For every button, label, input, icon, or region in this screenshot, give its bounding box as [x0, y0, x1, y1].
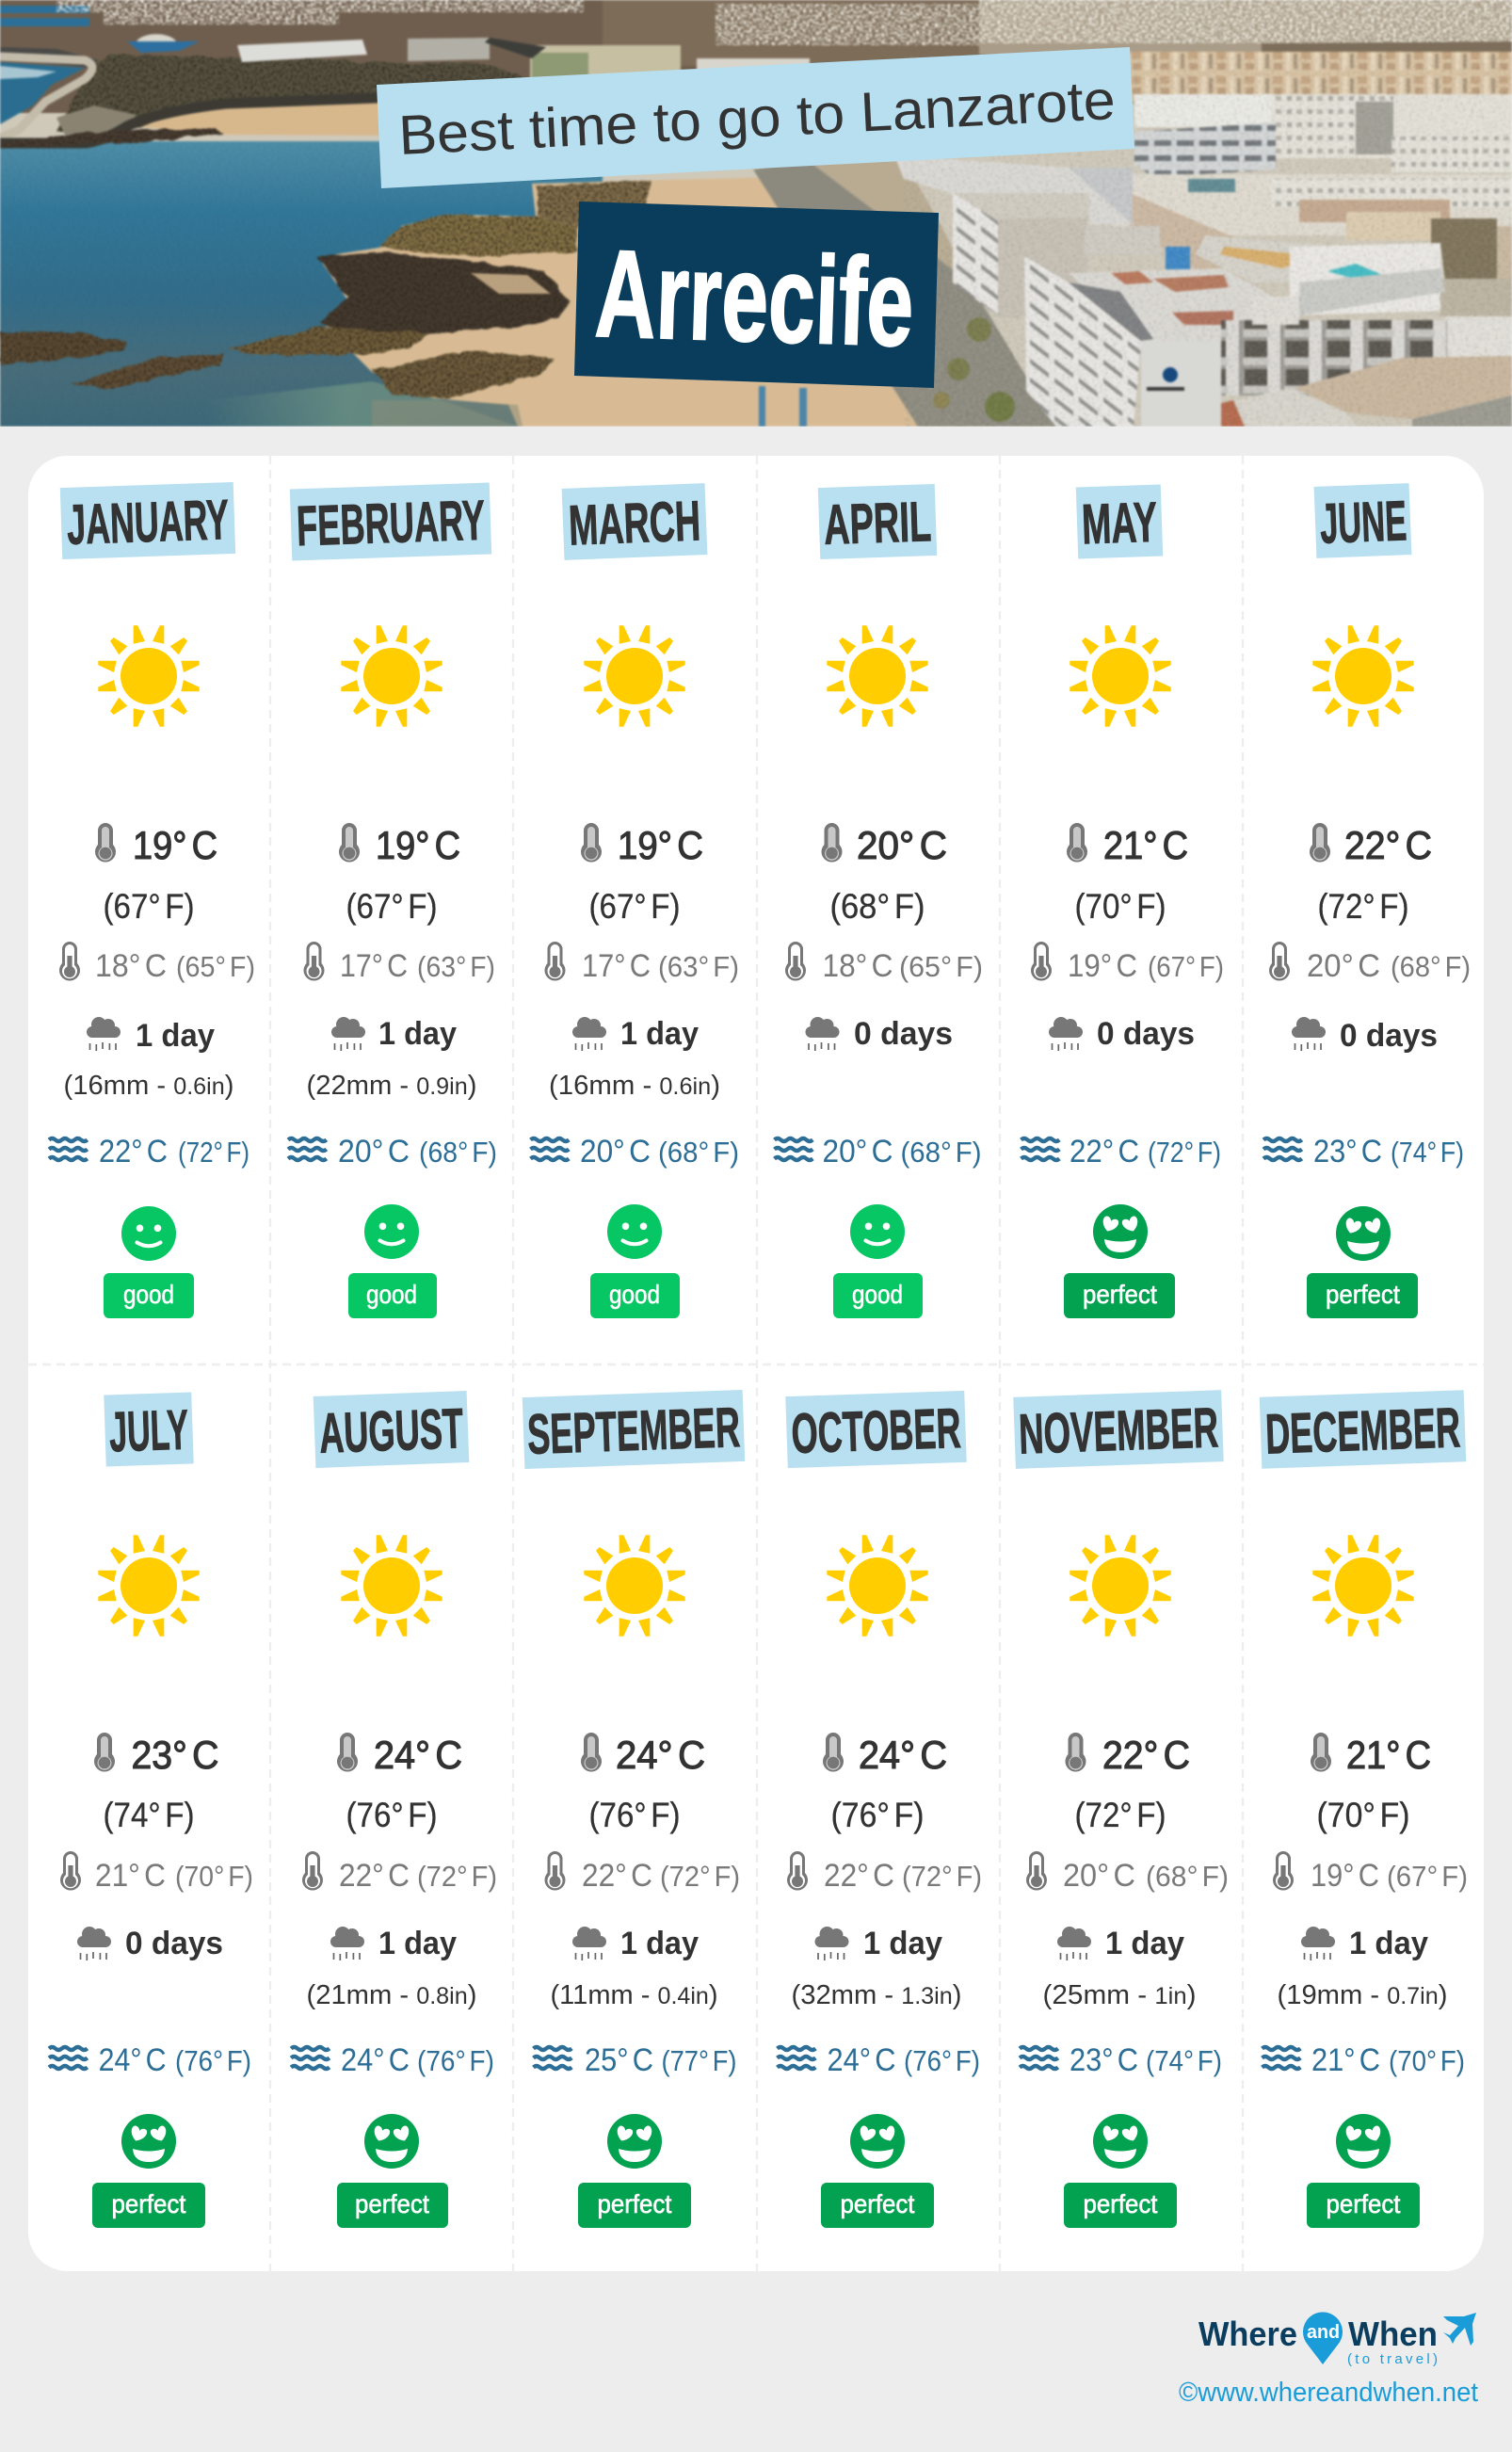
low temperature: (72° F): [902, 1860, 982, 1893]
month label: [1314, 483, 1411, 558]
month label: [104, 1392, 194, 1467]
icon: sun: [584, 1535, 685, 1637]
sea temperature: 23° C: [1313, 1134, 1382, 1170]
title banner: [377, 47, 1134, 188]
sea temperature: (68° F): [419, 1136, 497, 1169]
month label: [785, 1391, 967, 1468]
sea temperature: [531, 1134, 739, 1170]
month label: [290, 483, 491, 560]
sea temperature: 20° C: [338, 1134, 410, 1170]
high temperature: 19° C: [618, 823, 703, 867]
logo: Where and When to travel: and: [1307, 2322, 1340, 2343]
title text: Best time to go to Lanzarote: [397, 69, 1117, 167]
sea temperature: [49, 2042, 251, 2078]
high temperature: 24° C: [374, 1733, 462, 1777]
hotel sign tower: [1141, 341, 1221, 427]
high temperature: 21° C: [1346, 1733, 1431, 1777]
high temperature: [1067, 823, 1188, 926]
rainfall: [806, 1016, 953, 1052]
panel: May: [1000, 456, 1243, 1364]
rainfall: [550, 1926, 717, 2010]
rainfall: (21mm - 0.8in): [307, 1980, 476, 2010]
sea temperature: 22° C: [1070, 1134, 1139, 1170]
rainfall: (16mm - 0.6in): [64, 1071, 234, 1101]
icon: map pin: [1303, 2312, 1343, 2364]
panel: February: [270, 456, 513, 1364]
low temperature: [302, 1851, 497, 1894]
rating: perfect: [1307, 1206, 1418, 1318]
city detail texture: [904, 56, 1512, 427]
month label: JUNE: [1319, 489, 1407, 556]
high temperature: 22° C: [1344, 823, 1432, 867]
sea temperature: 22° C: [99, 1134, 168, 1170]
rainfall: [549, 1016, 720, 1101]
panel: April: [757, 456, 1000, 1364]
icon: sun: [1312, 1535, 1414, 1637]
icon: plane: [1443, 2313, 1476, 2346]
low temperature: [787, 1851, 982, 1894]
low temperature: [544, 942, 739, 984]
month label: MARCH: [568, 489, 701, 557]
high temperature: 21° C: [1103, 823, 1188, 867]
month label: MAY: [1081, 491, 1158, 556]
rating: good: good: [123, 1280, 174, 1309]
low temperature: 20° C: [1307, 948, 1380, 984]
low temperature: [1273, 1851, 1468, 1894]
month label: FEBRUARY: [296, 489, 486, 557]
sea temperature: [1262, 2042, 1465, 2078]
rainfall: 0 days: [1340, 1018, 1438, 1054]
panel: monthly climate card: [28, 456, 1484, 2271]
month label: AUGUST: [318, 1396, 464, 1465]
header photo: aerial view of Arrecife: [0, 0, 1512, 427]
rating: good: [833, 1204, 923, 1318]
high temperature: (76° F): [830, 1796, 925, 1834]
rating: perfect: perfect: [111, 2189, 186, 2218]
icon: sun: [1312, 625, 1414, 727]
high temperature: 24° C: [859, 1733, 947, 1777]
sea: [0, 141, 603, 427]
low temperature: (67° F): [1387, 1860, 1468, 1893]
low temperature: [785, 942, 983, 984]
high temperature: (67° F): [589, 887, 680, 926]
rating: perfect: perfect: [1326, 2189, 1401, 2218]
high temperature: 19° C: [133, 823, 217, 867]
high temperature: [823, 1733, 947, 1834]
high temperature: (68° F): [830, 887, 925, 926]
sea temperature: (77° F): [661, 2044, 736, 2077]
icon: sun: [827, 625, 928, 727]
high temperature: [581, 823, 703, 926]
high temperature: 23° C: [132, 1733, 218, 1777]
rating: perfect: perfect: [355, 2189, 429, 2218]
month label: JULY: [108, 1398, 189, 1463]
logo: Where and When to travel: (to travel): [1347, 2351, 1438, 2367]
sea temperature: [291, 2042, 494, 2078]
rainfall: [1043, 1926, 1196, 2010]
month label: [818, 484, 937, 559]
icon: sun: [98, 625, 200, 727]
low temperature: (68° F): [1146, 1860, 1229, 1893]
month label: [314, 1391, 469, 1468]
panel: November: [1000, 1364, 1243, 2271]
high temperature: [581, 1733, 705, 1834]
sea temperature: 24° C: [99, 2042, 167, 2078]
water grain texture: [6, 169, 7, 171]
rating: perfect: [821, 2114, 934, 2228]
month label: SEPTEMBER: [526, 1395, 741, 1466]
rainfall: [791, 1926, 961, 2010]
shallow green water: [207, 381, 518, 427]
rainfall: 1 day: [620, 1926, 699, 1961]
hotel main facade: [1024, 256, 1141, 427]
low temperature: 19° C: [1068, 948, 1137, 984]
high temperature: [337, 1733, 462, 1834]
month label: [523, 1390, 745, 1469]
dome, hangar and hotels: [137, 34, 176, 41]
high temperature: (67° F): [346, 887, 437, 926]
low temperature: 17° C: [582, 948, 651, 984]
rainfall: 0 days: [125, 1926, 223, 1961]
sea temperature: [49, 1134, 249, 1170]
month label: [562, 483, 707, 560]
panel: March: [513, 456, 757, 1364]
rainfall: (22mm - 0.9in): [307, 1071, 476, 1101]
city name: Arrecife: [593, 224, 916, 372]
rainfall: [1049, 1016, 1195, 1052]
rainfall: 1 day: [620, 1016, 699, 1052]
rocks: [0, 128, 650, 398]
low temperature: (63° F): [417, 950, 495, 983]
land behind the shore: [0, 0, 699, 115]
low temperature: (65° F): [176, 950, 255, 983]
rating: perfect: [1064, 1204, 1175, 1318]
low temperature: (63° F): [658, 950, 739, 983]
low temperature: (65° F): [899, 950, 983, 983]
rainfall: (25mm - 1in): [1043, 1980, 1196, 2010]
foreground roofs: [1295, 356, 1512, 419]
high temperature: 19° C: [376, 823, 460, 867]
month label: [1013, 1390, 1224, 1469]
beach umbrellas: [759, 386, 765, 427]
rating: perfect: perfect: [840, 2189, 915, 2218]
sea temperature: [1021, 1134, 1221, 1170]
low temperature: (72° F): [417, 1860, 497, 1893]
icon: sun: [98, 1535, 200, 1637]
low temperature: 22° C: [824, 1858, 894, 1894]
rating: perfect: perfect: [1083, 2189, 1158, 2218]
panel: August: [270, 1364, 513, 2271]
rainfall: 1 day: [136, 1018, 215, 1054]
month label: [1076, 485, 1163, 558]
high temperature: [1310, 823, 1432, 926]
low temperature: 20° C: [1063, 1858, 1135, 1894]
rainfall: (11mm - 0.4in): [550, 1980, 717, 2010]
sea temperature: (68° F): [900, 1136, 981, 1169]
low temperature: 19° C: [1311, 1858, 1379, 1894]
high temperature: (76° F): [346, 1796, 437, 1834]
inlet sea and promenade: [0, 62, 85, 124]
hotel logo mark: [1163, 367, 1178, 382]
high temperature: [1066, 1733, 1190, 1834]
rainfall: [1292, 1017, 1438, 1054]
rating: perfect: perfect: [1083, 1280, 1157, 1309]
low temperature: [59, 942, 255, 984]
icon: sun: [341, 1535, 442, 1637]
panel: June: [1243, 456, 1484, 1364]
low temperature: (70° F): [175, 1860, 253, 1893]
rating: perfect: [1307, 2114, 1420, 2228]
sea temperature: [1020, 2042, 1222, 2078]
month label: JANUARY: [66, 488, 230, 557]
sea temperature: (72° F): [1148, 1136, 1221, 1169]
rainfall: [1277, 1926, 1448, 2010]
rainfall: (19mm - 0.7in): [1277, 1980, 1448, 2010]
month label: APRIL: [823, 490, 932, 557]
rainfall: (32mm - 1.3in): [791, 1980, 961, 2010]
sea temperature: [288, 1134, 497, 1170]
low temperature: [1026, 1851, 1229, 1894]
sea temperature: (76° F): [904, 2044, 980, 2077]
low temperature: (68° F): [1391, 950, 1471, 983]
sea temperature: (72° F): [178, 1136, 249, 1169]
low temperature: 22° C: [582, 1858, 652, 1894]
high temperature: (74° F): [104, 1796, 194, 1834]
sea temperature: (74° F): [1146, 2044, 1222, 2077]
panel: January: [28, 456, 270, 1364]
rainfall: 1 day: [378, 1926, 457, 1961]
town beach: [141, 102, 378, 137]
panel: December: [1243, 1364, 1484, 2271]
high temperature: (72° F): [1075, 1796, 1166, 1834]
city name box: [574, 202, 939, 388]
low temperature: (72° F): [660, 1860, 740, 1893]
sea temperature: 20° C: [580, 1134, 651, 1170]
sea wall: [0, 92, 378, 150]
high temperature: [339, 823, 460, 926]
low temperature: 21° C: [95, 1858, 166, 1894]
logo: Where and When to travel: [1198, 2312, 1476, 2367]
icon: sun: [827, 1535, 928, 1637]
rating: good: [348, 1204, 437, 1318]
sea temperature: [533, 2042, 736, 2078]
high temperature: [95, 823, 217, 926]
sea temperature: 25° C: [585, 2042, 653, 2078]
high temperature: [1311, 1733, 1431, 1834]
high temperature: [94, 1733, 218, 1834]
rating: perfect: [578, 2114, 691, 2228]
rating: perfect: perfect: [1326, 1280, 1400, 1309]
upper right town: [979, 0, 1512, 55]
rainfall: 0 days: [1097, 1016, 1195, 1052]
rating: perfect: [92, 2114, 205, 2228]
icon: sun: [1070, 1535, 1171, 1637]
sea temperature: (74° F): [1391, 1136, 1464, 1169]
large grey blocks: [894, 155, 1134, 226]
panel: September: [513, 1364, 757, 2271]
month label: NOVEMBER: [1018, 1395, 1219, 1466]
sea temperature: [778, 2042, 980, 2078]
sea temperature: [1263, 1134, 1464, 1170]
high temperature: (70° F): [1316, 1796, 1410, 1834]
sea temperature: 20° C: [823, 1134, 893, 1170]
logo: Where and When to travel: When: [1348, 2315, 1438, 2353]
sea temperature: (68° F): [658, 1136, 739, 1169]
beach front road and palms: [753, 160, 1056, 427]
panel: October: [757, 1364, 1000, 2271]
rainfall: (16mm - 0.6in): [549, 1071, 720, 1101]
month label: [60, 482, 235, 559]
rating: perfect: perfect: [597, 2189, 672, 2218]
hotel balcony facade: [1221, 320, 1447, 395]
rating: good: [590, 1204, 680, 1318]
icon: sun: [1070, 625, 1171, 727]
sea temperature: 24° C: [827, 2042, 896, 2078]
low temperature: [303, 942, 495, 984]
high temperature: (67° F): [104, 887, 194, 926]
hotel rooftop terrace with pool: [1290, 243, 1440, 315]
low temperature: [60, 1851, 253, 1894]
low temperature: (67° F): [1148, 950, 1224, 983]
month label: OCTOBER: [790, 1396, 962, 1465]
rainfall: [77, 1926, 223, 1961]
rainfall: [307, 1926, 476, 2010]
rainfall: [307, 1016, 476, 1101]
sand: [318, 176, 951, 427]
sea temperature: (76° F): [417, 2044, 494, 2077]
high temperature: (70° F): [1075, 887, 1166, 926]
low temperature: 22° C: [339, 1858, 410, 1894]
sea temperature: (70° F): [1389, 2044, 1465, 2077]
high temperature: 22° C: [1102, 1733, 1190, 1777]
rainfall: 1 day: [1349, 1926, 1428, 1961]
sea temperature: 21° C: [1311, 2042, 1380, 2078]
high temperature: 24° C: [616, 1733, 705, 1777]
high temperature: 20° C: [857, 823, 947, 867]
low temperature: [1269, 942, 1471, 984]
rainfall: [64, 1017, 234, 1101]
rating: good: good: [609, 1280, 660, 1309]
rating: perfect: [1064, 2114, 1177, 2228]
panel: July: [28, 1364, 270, 2271]
low temperature: 18° C: [95, 948, 167, 984]
town mid: [1130, 52, 1512, 104]
rating: good: [104, 1206, 194, 1318]
icon: sun: [584, 625, 685, 727]
high temperature: [821, 823, 947, 926]
low temperature: [1031, 942, 1224, 984]
rainfall: 0 days: [854, 1016, 953, 1052]
icon: sun: [341, 625, 442, 727]
low temperature: [544, 1851, 740, 1894]
rainfall: 1 day: [378, 1016, 457, 1052]
rainfall: 1 day: [1105, 1926, 1184, 1961]
high temperature: (72° F): [1318, 887, 1408, 926]
rating: good: good: [366, 1280, 417, 1309]
sea temperature: (76° F): [175, 2044, 251, 2077]
rating: perfect: [337, 2114, 448, 2228]
website credit: ©www.whereandwhen.net: [1179, 2378, 1478, 2408]
sea temperature: 24° C: [341, 2042, 410, 2078]
dark palm gardens: [56, 55, 527, 132]
high temperature: (76° F): [589, 1796, 680, 1834]
rating: good: good: [852, 1280, 903, 1309]
rainfall: 1 day: [863, 1926, 942, 1961]
sea temperature: 23° C: [1070, 2042, 1138, 2078]
logo: Where and When to travel: Where: [1198, 2315, 1297, 2353]
sea temperature: [774, 1134, 981, 1170]
low temperature: 17° C: [340, 948, 408, 984]
low temperature: 18° C: [823, 948, 893, 984]
